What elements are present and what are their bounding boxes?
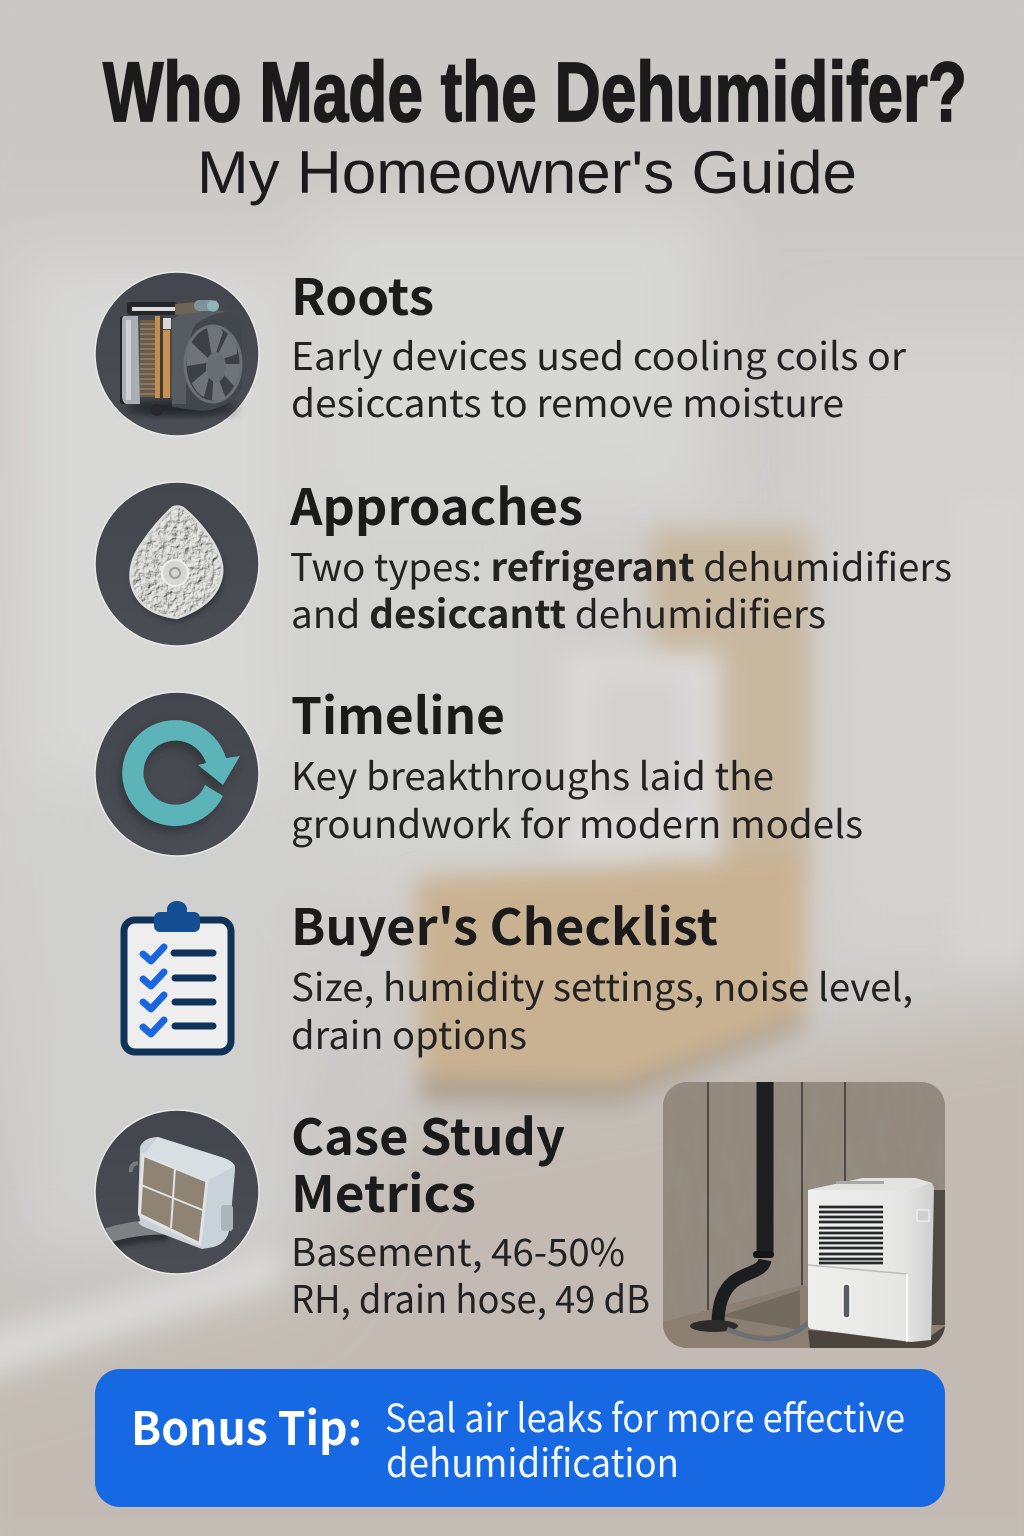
heading: Buyer's Checklist	[291, 888, 718, 960]
icon: desiccant drop	[95, 482, 259, 646]
text block: Two types: refrigerant dehumidifiers	[290, 537, 952, 592]
text block	[291, 957, 913, 1060]
text block: drain options	[291, 1005, 527, 1060]
heading: Approaches	[289, 468, 583, 540]
text block: Key breakthroughs laid the	[291, 746, 774, 801]
text block: Size, humidity settings, noise level,	[291, 957, 913, 1012]
subtitle: My Homeowner's Guide	[197, 139, 857, 206]
heading	[291, 1098, 565, 1227]
callout label: Bonus Tip:	[131, 1393, 362, 1459]
text block: groundwork for modern models	[291, 794, 863, 849]
callout text	[385, 1388, 905, 1489]
text block: Basement, 46-50%	[291, 1222, 625, 1277]
panel: roots	[95, 258, 906, 436]
text block	[291, 326, 906, 428]
text block	[291, 1222, 650, 1324]
icon: cooling coil and fan	[95, 272, 259, 436]
callout: bonus tip	[95, 1369, 945, 1507]
panel: buyer's checklist	[124, 888, 913, 1060]
text block: and desiccantt dehumidifiers	[291, 584, 826, 639]
title	[103, 45, 967, 206]
icon: circular arrow	[95, 692, 259, 856]
icon: filter unit with hose	[95, 1110, 259, 1274]
callout text: Seal air leaks for more effective	[385, 1388, 905, 1444]
heading: Case Study	[291, 1098, 565, 1170]
text block: desiccants to remove moisture	[291, 373, 844, 428]
arrow	[122, 720, 240, 826]
panel: case study metrics	[95, 1098, 650, 1324]
text block	[290, 537, 952, 639]
text block	[291, 746, 863, 849]
heading: Metrics	[291, 1155, 476, 1227]
callout text: dehumidification	[386, 1433, 679, 1489]
heading: Timeline	[291, 677, 505, 749]
panel: timeline	[95, 677, 863, 856]
text block: Early devices used cooling coils or	[291, 326, 906, 381]
photo: dehumidifier in basement	[663, 1082, 945, 1348]
heading: Roots	[291, 258, 434, 330]
icon: clipboard checklist	[124, 901, 231, 1052]
text block: RH, drain hose, 49 dB	[291, 1269, 650, 1324]
panel: approaches	[95, 468, 952, 646]
